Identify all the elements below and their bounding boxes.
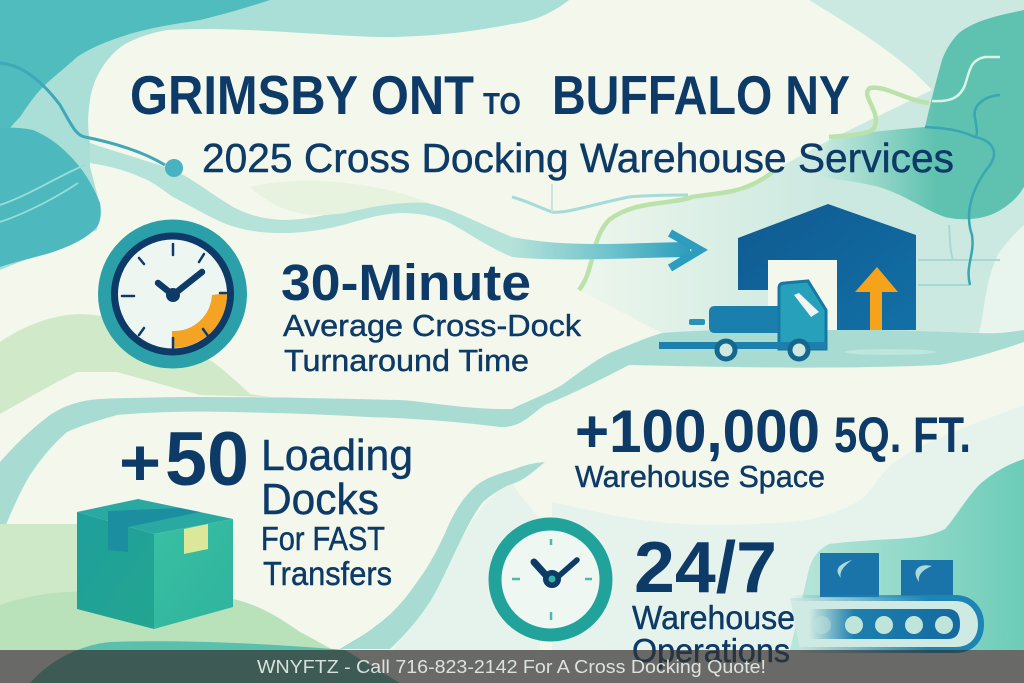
right pale field	[579, 0, 1024, 333]
icon: up arrow	[855, 267, 898, 330]
right teal blob	[818, 10, 1024, 219]
stat: warehouse space: Warehouse Space	[575, 459, 825, 494]
stat: 50 loading docks: Transfers	[263, 555, 392, 592]
title: TO	[483, 86, 521, 121]
line: green route	[579, 88, 929, 290]
title: BUFFALO NY	[552, 64, 850, 126]
left blob	[0, 128, 101, 267]
icon: warehouse	[738, 204, 916, 330]
lower right teal	[790, 459, 1024, 650]
stat: 30-minute	[281, 254, 582, 378]
mid teal band	[0, 328, 1024, 539]
stat: 30-minute: Turnaround Time	[284, 343, 529, 378]
icon: 24/7 clock	[495, 524, 606, 635]
footer-level teal	[340, 625, 390, 649]
stat: 50 loading docks: 50	[165, 417, 249, 502]
icon: box	[77, 499, 233, 629]
stat: warehouse space: 5Q. FT.	[834, 407, 971, 463]
lower left green	[0, 591, 333, 650]
stat: warehouse space: +100,000	[575, 398, 820, 465]
stat: 50 loading docks: For FAST	[261, 520, 385, 557]
icon: clock with orange sector	[98, 220, 247, 368]
lines: map lines on right blob	[925, 57, 1000, 285]
stat: 30-minute: 30-Minute	[281, 254, 531, 311]
left teal wisp	[0, 524, 30, 545]
footer bar	[0, 650, 1024, 683]
stat: 50 loading docks	[119, 417, 413, 592]
stat: 24/7	[632, 528, 795, 669]
stat: warehouse space	[575, 398, 971, 494]
icon: truck	[659, 281, 826, 359]
title	[130, 64, 850, 126]
subtitle: 2025 Cross Docking Warehouse Services	[202, 135, 954, 181]
top-left light wash	[0, 0, 569, 270]
stat: 50 loading docks: +	[119, 425, 161, 499]
stat: 24/7: Operations	[632, 632, 790, 669]
lower right pale	[552, 405, 1024, 650]
thin pale lines	[512, 195, 688, 212]
lower curve band	[340, 462, 545, 649]
pale band under subtitle	[90, 143, 512, 257]
stat: 24/7: 24/7	[634, 528, 777, 608]
icon: conveyor	[790, 553, 981, 650]
green left wash	[0, 314, 333, 414]
line: route to start point	[0, 63, 183, 177]
stat: 50 loading docks: Docks	[261, 475, 379, 524]
top-left dark blob	[0, 0, 270, 140]
stat: 24/7: Warehouse	[632, 599, 795, 636]
stat: 30-minute: Average Cross-Dock	[283, 308, 582, 343]
footer bar: WNYFTZ - Call 716-823-2142 For A Cross Docking Quote!	[257, 656, 766, 677]
title: GRIMSBY ONT	[130, 64, 474, 126]
stat: 50 loading docks: Loading	[261, 431, 413, 480]
arrow: flow to warehouse	[512, 233, 700, 268]
